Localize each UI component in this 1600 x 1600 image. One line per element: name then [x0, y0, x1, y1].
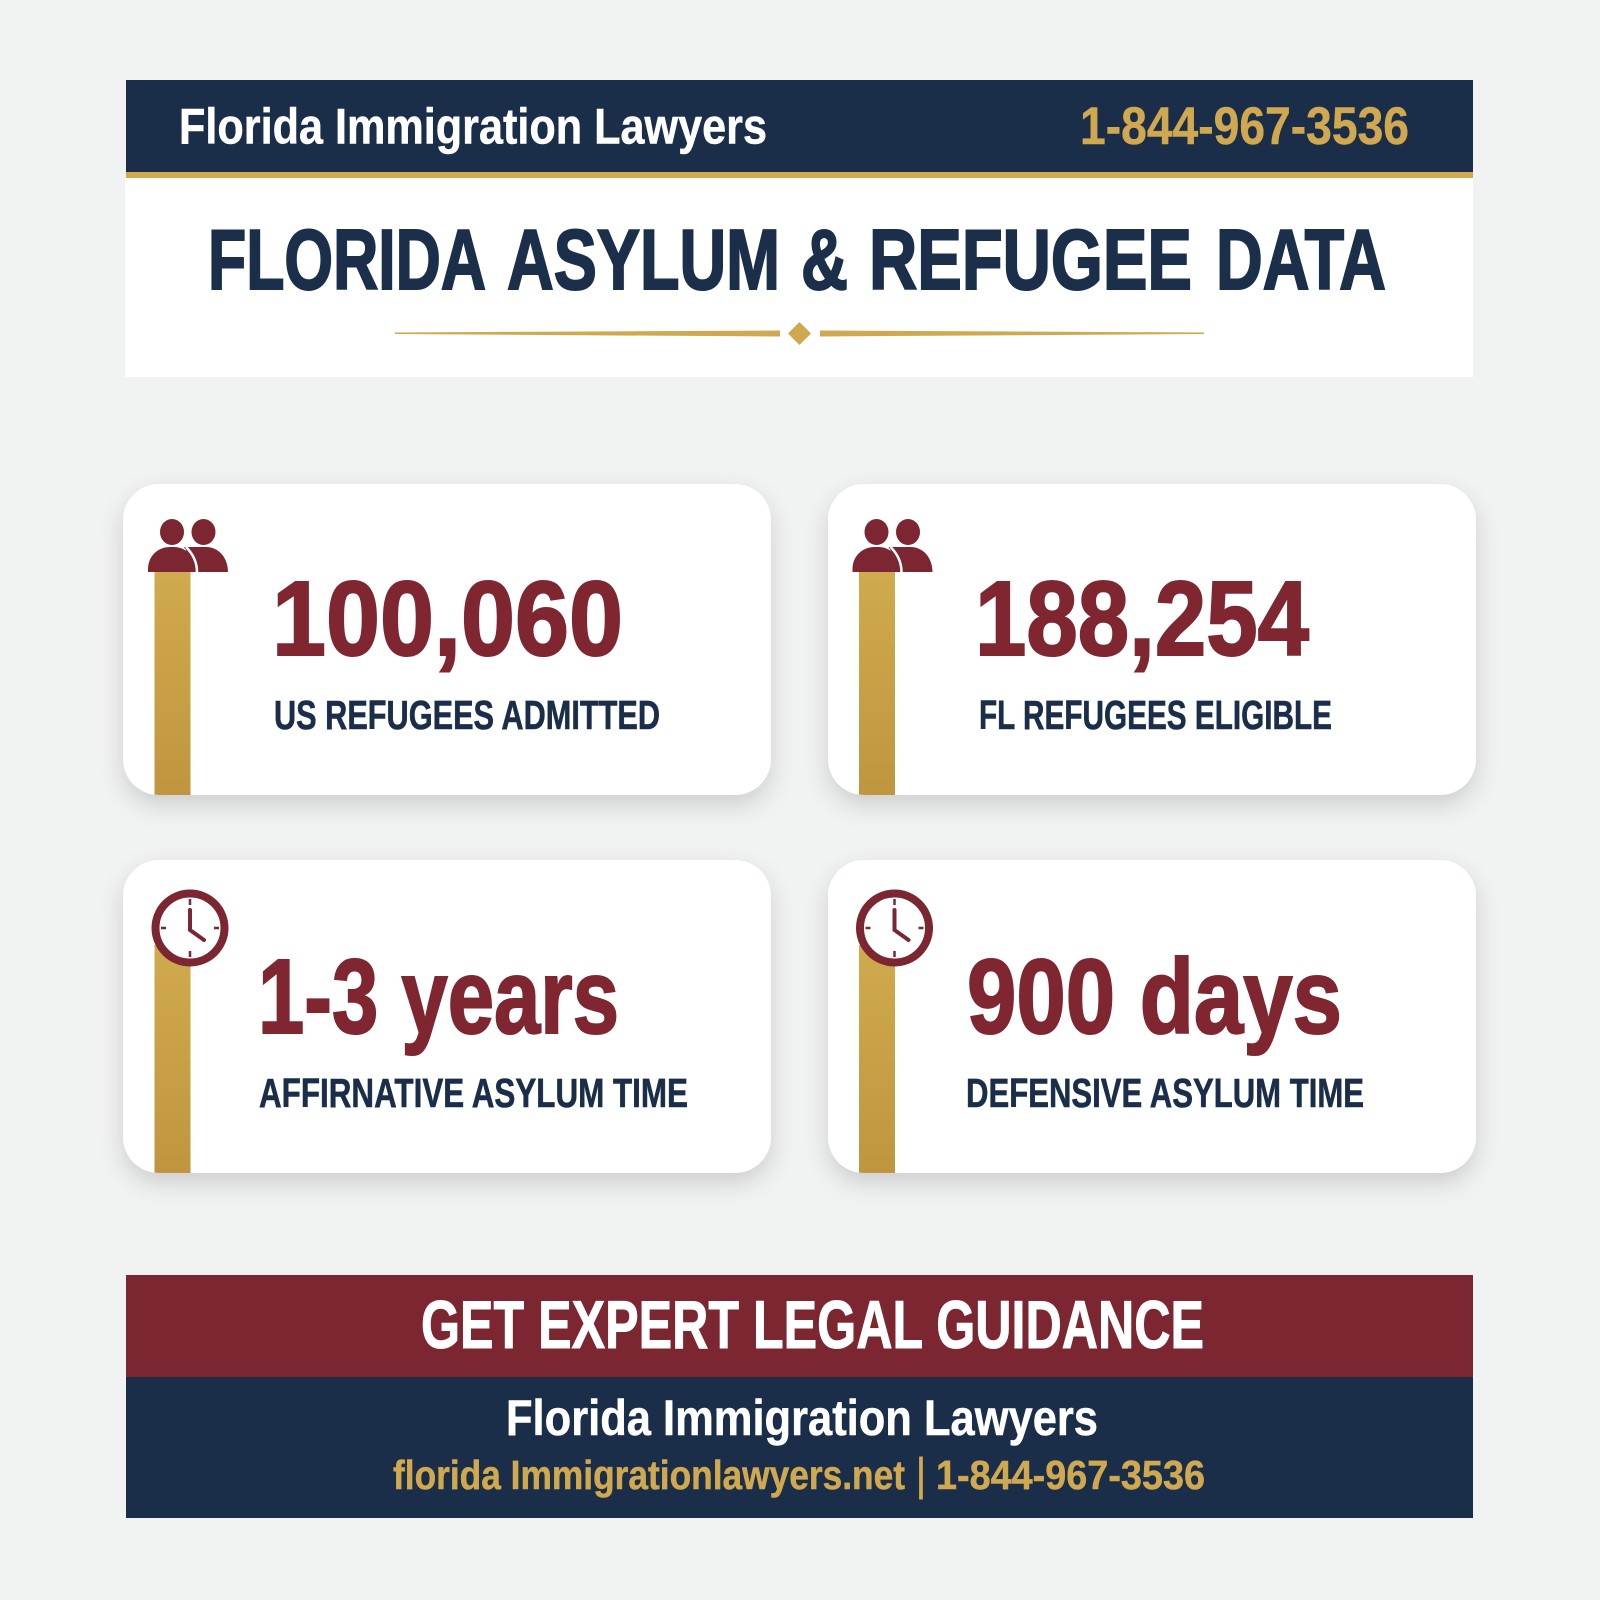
statistic label: DEFENSIVE ASYLUM TIME [966, 1070, 1364, 1116]
phone number: 1-844-967-3536 [936, 1452, 1205, 1498]
statistic label: AFFIRNATIVE ASYLUM TIME [259, 1070, 688, 1116]
gold rule [126, 172, 1473, 178]
separator: | [915, 1448, 927, 1500]
panel: affirmative asylum time [123, 860, 771, 1173]
title: REFUGEE [869, 213, 1192, 308]
gold bar [154, 945, 190, 1173]
title: DATA [1216, 213, 1386, 308]
card background [828, 860, 1476, 1173]
panel: footer call to action [126, 1275, 1473, 1518]
panel: US refugees admitted [123, 484, 771, 795]
gold bar [154, 572, 190, 795]
call to action heading: GET EXPERT LEGAL GUIDANCE [421, 1287, 1204, 1363]
statistic: 1-3 years [258, 938, 619, 1056]
statistic label: FL REFUGEES ELIGIBLE [979, 692, 1332, 738]
navy banner [126, 1377, 1473, 1518]
red banner [126, 1275, 1473, 1377]
icon: clock [860, 894, 929, 962]
gold bar [859, 945, 895, 1173]
title: & [801, 213, 848, 308]
gold bar [859, 572, 895, 795]
title [208, 213, 1386, 308]
statistic: 100,060 [272, 560, 623, 678]
title: ASYLUM [507, 213, 780, 308]
infographic: Florida asylum and refugee data [114, 80, 1485, 1518]
firm name: Florida Immigration Lawyers [179, 98, 767, 154]
statistic: 900 days [967, 938, 1342, 1056]
header bar [126, 80, 1473, 172]
statistic label: US REFUGEES ADMITTED [274, 692, 660, 738]
card background [123, 860, 771, 1173]
card background [828, 484, 1476, 795]
firm name: Florida Immigration Lawyers [506, 1390, 1098, 1446]
website: florida Immigrationlawyers.net [393, 1452, 905, 1498]
panel: header [125, 80, 1473, 377]
phone number: 1-844-967-3536 [1080, 97, 1409, 156]
card background [123, 484, 771, 795]
title panel background [125, 178, 1473, 377]
title: FLORIDA [208, 213, 486, 308]
icon: people [148, 519, 228, 572]
panel: FL refugees eligible [828, 484, 1476, 795]
icon: people [852, 519, 932, 572]
panel: defensive asylum time [828, 860, 1476, 1173]
statistic: 188,254 [975, 560, 1309, 678]
icon: clock [156, 894, 224, 962]
title divider [395, 322, 1204, 345]
